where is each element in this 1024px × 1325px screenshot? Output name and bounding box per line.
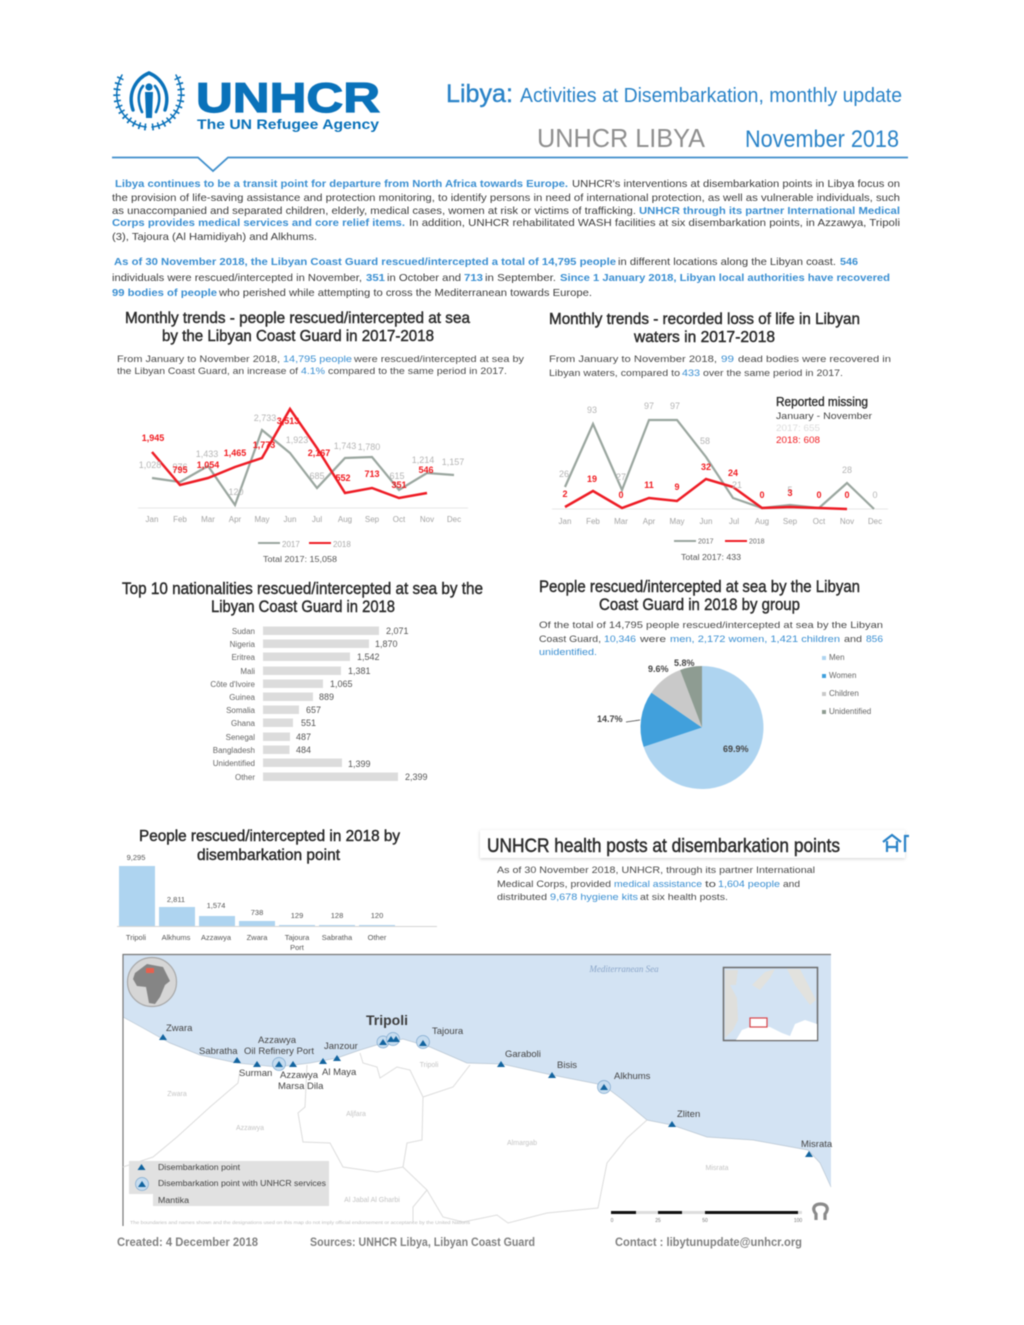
labels 2018: 3,513 [277,416,299,426]
header rule with notch [112,158,908,171]
labels 2017: 2,733 [254,413,276,423]
values [296,626,428,782]
month axis: Mar [201,515,215,524]
intro paragraph 2: As of 30 November 2018, the Libyan Coast Guard rescued/intercepted a total of 14,795 people [114,256,616,268]
labels 2017: 28 [842,465,852,475]
labels 2018: 0 [844,490,850,500]
text block: distributed [497,892,547,903]
labels 2017: 5 [787,485,793,495]
intro paragraph 2: in October and [387,272,461,284]
labels 2017: 0 [872,490,878,500]
labels 2017: 27 [616,472,626,482]
values: 1,574 [207,901,225,910]
category labels: Bangladesh [213,746,255,755]
place labels: Al Maya [322,1067,357,1078]
legend: 2017 [282,540,300,549]
labels 2018: 1,945 [142,433,164,443]
labels 2017: 120 [228,487,244,497]
text block [549,354,891,379]
pie labels: 5.8% [674,658,695,668]
labels 2017: 97 [644,401,654,411]
icon: globe locator [128,958,176,1006]
text block: at six health posts. [640,892,728,903]
heading: Libyan Coast Guard in 2018 [211,597,395,616]
intro paragraph 1: Corps provides medical services and core relief items. [112,217,405,229]
text block: From January to November 2018, [117,354,280,365]
category labels: Eritrea [231,653,256,662]
text block: dead bodies were recovered in [738,354,891,365]
category labels: Somalia [226,706,256,715]
text block: From January to November 2018, [549,354,717,365]
labels 2018: 1,054 [197,460,219,470]
region labels: Aljfara [346,1111,366,1118]
panel: people by group [539,577,883,789]
labels 2017: 976 [172,462,188,472]
category labels: Senegal [226,733,255,742]
values: 129 [291,911,303,920]
labels 2018: 24 [728,468,738,478]
place labels: Surman [239,1068,272,1079]
text block: As of 30 November 2018, UNHCR, through its partner International [497,865,815,876]
legend: 2017 [698,538,714,546]
intro paragraph 1: UNHCR through its partner International Medical [639,205,900,217]
line chart: deaths [552,394,888,562]
text block [497,865,815,903]
heading [539,577,860,614]
place labels: Zwara [166,1023,193,1034]
month axis: Apr [229,515,242,524]
values: 9,295 [127,853,145,862]
month axis: Jul [729,517,739,526]
labels 2017: 1,028 [139,460,161,470]
intro paragraph 2: 351 [366,272,385,284]
created date: Created: 4 December 2018 [117,1237,259,1249]
month axis: May [254,515,270,524]
heading: waters in 2017-2018 [633,329,775,346]
category labels [210,627,256,782]
region labels [167,1062,729,1204]
month axis: Aug [755,517,769,526]
labels 2018: 11 [644,480,654,490]
text block [539,620,883,658]
line 2018 [565,479,847,509]
month axis: Jun [700,517,712,526]
admin boundaries [123,1053,647,1223]
map legend: Disembarkation point with UNHCR services [158,1179,326,1188]
intro paragraph 2 [112,256,890,299]
intro paragraph 1: In addition, UNHCR rehabilitated WASH facilities at six disembarkation points, in Azzawya, Tripoli [409,217,900,229]
category labels: Other [368,933,387,942]
category labels: Mali [240,667,255,676]
scale bar: 50 [702,1218,708,1224]
labels 2017: 1,743 [334,441,356,451]
map legend: Mantika [158,1196,190,1205]
text block: to [705,879,716,890]
labels 2018: 795 [172,465,188,475]
text block: and [783,879,800,890]
category labels: Alkhums [162,933,191,942]
labels 2018: 552 [335,473,351,483]
bar chart: nationalities [210,626,428,782]
callout: reported missing: 2017: 655 [776,423,820,433]
category labels [126,933,387,952]
logo wordmark: UNHCR [196,74,380,121]
map disclaimer: The boundaries and names shown and the designations used on this map do not imply official endorsement or acceptance by the United Nations [130,1220,471,1225]
bar chart: disembarkation points [117,853,437,952]
category labels: Unidentified [213,759,255,768]
month axis: Dec [868,517,882,526]
values: 738 [251,908,263,917]
text block: men, 2,172 women, 1,421 children [670,634,840,645]
title: Libya: Libya: [446,80,513,108]
text block: 856 [866,634,883,645]
labels 2018: 19 [587,474,597,484]
category labels: Port [290,943,305,952]
intro paragraph 2: individuals were rescued/intercepted in November, [112,272,362,284]
values: 128 [331,911,343,920]
labels 2018: 351 [391,480,407,490]
labels 2018: 0 [816,490,822,500]
month axis: Mar [614,517,628,526]
text block: Medical Corps, provided [497,879,611,890]
logo: UNHCR [117,73,380,132]
title: subtitle: Activities at Disembarkation, monthly update [520,85,902,107]
labels 2018: 546 [418,465,434,475]
values: 1,065 [330,679,353,689]
text block: medical assistance [614,879,702,890]
month axis: May [669,517,685,526]
place labels: Sabratha [199,1046,238,1057]
values: 1,381 [348,666,371,676]
slice: children [651,670,702,728]
place labels [166,1012,833,1150]
line chart: rescued [138,409,468,564]
text block: 99 [721,354,734,365]
scale bar [611,1211,802,1224]
text block: the Libyan Coast Guard, an increase of [117,366,298,377]
text block: 14,795 people [283,354,352,365]
legend: 2018 [749,538,765,546]
labels 2018: 3 [787,488,793,498]
labels 2018: 713 [364,469,380,479]
intro paragraph 1: as unaccompanied and separated children, elderly, medical cases, women at risk or victims of trafficking. [112,205,636,217]
place labels: Azzawya [258,1035,297,1046]
month axis: Jun [284,515,296,524]
inset map [724,968,818,1040]
heading: UNHCR health posts at disembarkation points [487,836,840,857]
text block: 433 [682,368,700,379]
month axis: Oct [393,515,406,524]
values: 120 [371,911,383,920]
labels 2018 [142,416,434,490]
callout: reported missing: 2018: 608 [776,435,820,445]
markers [159,1034,813,1157]
pie legend: Children [829,689,859,698]
pie legend: Women [829,671,856,680]
heading [139,828,400,864]
month axis: Feb [586,517,600,526]
slice: men [644,666,763,789]
pie chart [597,653,871,789]
values: 2,071 [386,626,409,636]
place labels: Garaboli [505,1049,541,1060]
labels 2017: 1,157 [442,457,464,467]
scale bar: 100 [794,1218,802,1224]
text block: compared to the same period in 2017. [328,366,507,377]
category labels: Nigeria [230,640,256,649]
panel: health posts [480,830,909,903]
heading [549,311,860,346]
region labels: Misrata [706,1165,729,1172]
callout: reported missing: Reported missing [776,394,868,409]
logo tagline: The UN Refugee Agency [197,116,379,132]
service circles [272,1032,610,1094]
heading: Top 10 nationalities rescued/intercepted at sea by the [122,579,483,598]
place labels: Tajoura [432,1026,464,1037]
category labels: Sudan [232,627,255,636]
labels 2017 [139,413,464,497]
map legend [129,1161,329,1206]
values: 2,399 [405,772,428,782]
values: 657 [306,705,321,715]
labels 2017: 21 [732,480,742,490]
labels 2017: 97 [670,401,680,411]
category labels: Côte d'Ivoire [210,680,256,689]
place labels: Azzawya [280,1070,319,1081]
region labels: Al Jabal Al Gharbi [344,1197,400,1204]
intro paragraph 1 [112,178,900,243]
labels 2018: 0 [618,490,624,500]
place labels: Bisis [557,1060,577,1071]
month axis: Jan [146,515,158,524]
text block: 1,604 people [718,879,780,890]
heading: Coast Guard in 2018 by group [599,595,800,614]
land [123,1017,831,1226]
callout: reported missing [776,394,872,445]
place labels: Misrata [801,1139,833,1150]
intro paragraph 1: Libya continues to be a transit point for departure from North Africa towards Europe. [115,178,568,190]
month axis: Jan [559,517,571,526]
month axis: Sep [365,515,380,524]
icon: health post [883,835,909,852]
map borders [123,954,831,1226]
pie labels: 69.9% [723,744,749,754]
pie labels [597,658,749,754]
heading [125,310,470,345]
header strip [480,830,905,858]
coastline [123,1017,831,1187]
intro paragraph 2: 713 [464,272,483,284]
place labels: Alkhums [614,1071,651,1082]
text block: Of the total of 14,795 people rescued/intercepted at sea by the Libyan [539,620,883,631]
text block: and [844,634,862,645]
title [446,80,902,153]
intro paragraph 2: in September. [485,272,556,284]
heading: People rescued/intercepted at sea by the Libyan [539,577,860,596]
labels 2018: 9 [674,482,680,492]
month axis [559,517,882,526]
line 2018 [152,409,427,498]
text block: 4.1% [301,366,326,377]
values [127,853,383,920]
month axis: Aug [338,515,352,524]
intro paragraph 2: 546 [840,256,858,268]
region labels: Azzawya [236,1125,264,1132]
text block: Coast Guard, [539,634,601,645]
month axis: Jul [312,515,322,524]
heading: Monthly trends - people rescued/intercepted at sea [125,310,470,327]
values: 487 [296,732,311,742]
slice: unidentified [680,666,702,728]
heading [122,579,483,616]
heading: Monthly trends - recorded loss of life in Libyan [549,311,860,328]
month axis: Dec [447,515,461,524]
labels 2017: 1,214 [412,455,434,465]
pie labels: 14.7% [597,714,623,724]
bars [263,626,398,781]
bars [119,866,395,926]
scale bar: 25 [655,1218,661,1224]
place labels: Janzour [324,1041,358,1052]
text block: 9,678 hygiene kits [550,892,638,903]
map legend: Disembarkation point [158,1163,241,1172]
intro paragraph 2: 99 bodies of people [112,287,217,299]
pie labels: 9.6% [648,664,669,674]
month axis: Nov [840,517,854,526]
intro paragraph 2: Since 1 January 2018, Libyan local authorities have recovered [560,272,890,284]
month axis: Nov [420,515,434,524]
labels 2017: 1,780 [358,442,380,452]
category labels: Guinea [229,693,256,702]
callout: reported missing: January - November [776,411,872,422]
values: 889 [319,692,334,702]
intro paragraph 2: who perished while attempting to cross the Mediterranean towards Europe. [218,287,592,299]
sea label: Mediterranean Sea [588,964,659,974]
panel: monthly trends loss of life [549,311,891,562]
panel: top 10 nationalities [122,579,483,782]
legend [674,538,765,546]
intro paragraph 1: the provision of life-saving assistance and protection monitoring, to identify persons in need of international protection, as well as vulnerable individuals, such [112,192,900,204]
labels 2018: 1,465 [224,448,246,458]
intro paragraph 2: in different locations along the Libyan coast. [618,256,836,268]
values: 551 [301,718,316,728]
labels 2017: 615 [389,471,405,481]
heading: People rescued/intercepted in 2018 by [139,828,400,845]
labels 2017: 1,923 [286,435,308,445]
line 2017 [565,420,874,509]
labels 2017: 685 [309,471,325,481]
category labels: Tripoli [126,933,146,942]
values: 1,399 [348,759,371,769]
panel: by disembarkation point [117,828,437,952]
text block: were [639,634,666,645]
sources: Sources: UNHCR Libya, Libyan Coast Guard [310,1237,535,1249]
labels 2017: 58 [700,436,710,446]
intro paragraph 1: (3), Tajoura (Al Hamidiyah) and Alkhums. [112,231,317,243]
title: UNHCR Libya: UNHCR LIBYA [537,123,706,153]
category labels: Azzawya [201,933,232,942]
text block: Libyan waters, compared to [549,368,680,379]
text block: 10,346 [604,634,636,645]
month axis: Sep [783,517,798,526]
text block [117,354,524,377]
labels 2017: 1,433 [196,449,218,459]
inset locator [750,1018,767,1027]
labels 2018: 2,167 [308,448,330,458]
legend: 2018 [333,540,351,549]
title: date: November 2018 [745,126,899,153]
labels 2017: 93 [587,405,597,415]
pie legend [822,653,871,716]
scale bar: 0 [611,1218,614,1224]
category labels: Other [235,773,255,782]
pie legend: Unidentified [829,707,871,716]
intro paragraph 1: UNHCR's interventions at disembarkation points in Libya focus on [572,178,900,190]
sea [123,954,831,1226]
labels 2018: 32 [701,462,711,472]
region labels: Zwara [167,1091,187,1098]
category labels: Ghana [231,719,256,728]
labels 2018: 1,773 [253,440,275,450]
values: 1,542 [357,652,380,662]
total: Total 2017: 433 [681,553,742,562]
labels 2017: 26 [559,469,569,479]
labels 2018: 0 [759,490,765,500]
icon: UNHCR emblem [117,73,181,127]
pie legend: Men [829,653,845,662]
text block: were rescued/intercepted at sea by [353,354,524,365]
icon: north arrow [814,1204,827,1220]
month axis: Oct [813,517,826,526]
region labels: Tripoli [420,1062,439,1069]
heading: by the Libyan Coast Guard in 2017-2018 [162,328,434,345]
heading: disembarkation point [197,847,341,864]
category labels: Sabratha [322,933,353,942]
total: Total 2017: 15,058 [263,555,338,564]
labels 2018: 2 [562,489,568,499]
values: 2,811 [167,895,185,904]
map: Libyan coast [123,954,833,1226]
contact: Contact : libytunupdate@unhcr.org [615,1237,802,1249]
place labels: Tripoli [366,1012,408,1028]
legend [258,540,351,549]
labels 2017 [559,401,878,500]
labels 2018 [562,462,850,500]
category labels: Tajoura [285,933,310,942]
text block: unidentified. [539,647,597,658]
values: 1,870 [375,639,398,649]
category labels: Zwara [247,933,268,942]
text block: over the same period in 2017. [703,368,843,379]
region labels: Almargab [507,1140,537,1147]
month axis [146,515,461,524]
footer [117,1237,802,1249]
place labels: Oil Refinery Port [244,1046,314,1057]
place labels: Zliten [677,1109,700,1120]
month axis: Feb [173,515,187,524]
panel: monthly trends rescued [117,310,524,564]
month axis: Apr [643,517,656,526]
place labels: Marsa Dila [278,1081,324,1092]
slice: women [640,693,702,747]
values: 484 [296,745,311,755]
line 2017 [152,430,454,505]
